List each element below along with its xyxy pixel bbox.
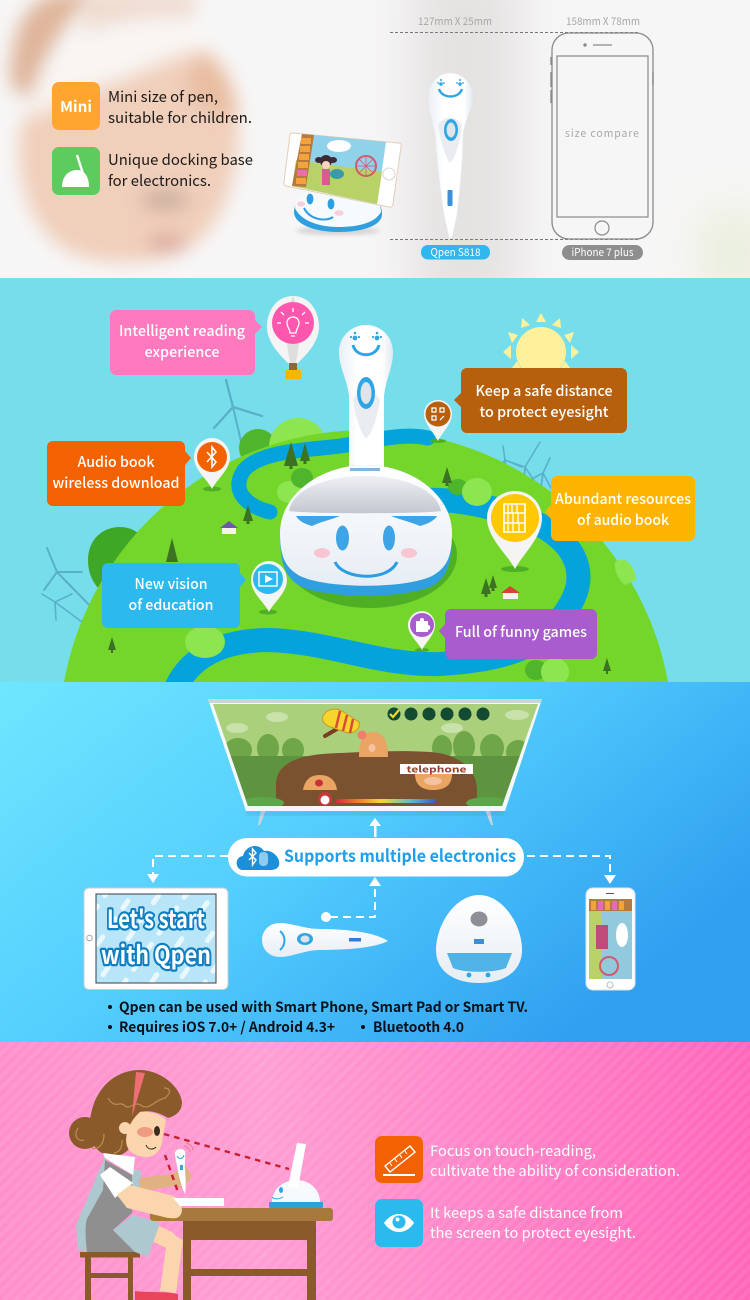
tablet: with Qpen (101, 936, 211, 972)
docking base (280, 465, 452, 596)
game: timer (318, 792, 436, 806)
callout: new vision (102, 563, 246, 628)
blurred baby photo (10, 0, 239, 263)
game: score dots (388, 708, 490, 720)
ear (119, 1122, 131, 1134)
panel: size comparison (0, 0, 750, 278)
callout: funny games: Full of funny games (455, 621, 587, 642)
pen held (175, 1143, 193, 1194)
callout: funny games (439, 609, 597, 659)
callout: intelligent reading: experience (144, 341, 220, 362)
panel: connectivity (0, 682, 750, 1042)
headband (132, 1072, 145, 1117)
sight lines (164, 1134, 289, 1192)
icon: pin bookshelf (487, 491, 542, 572)
game: word label: telephone (406, 762, 466, 776)
icon: pin safe distance (424, 400, 452, 443)
dock with phone (284, 133, 401, 235)
cardigan back (76, 1157, 120, 1252)
label: Qpen S818: Qpen S818 (430, 245, 481, 260)
tablet (84, 888, 228, 990)
callout: abundant resources (545, 476, 695, 541)
dock top view (436, 895, 522, 983)
trees (108, 442, 611, 674)
docking base small (269, 1143, 323, 1208)
text: docking base: for electronics. (108, 170, 211, 191)
text: distance: the screen to protect eyesight. (430, 1222, 636, 1243)
phone outline (551, 33, 653, 239)
bushes behind hill (88, 418, 332, 588)
callout: safe distance: to protect eyesight (480, 401, 609, 422)
text: docking base (108, 153, 252, 186)
callout: safe distance: Keep a safe distance (476, 380, 612, 401)
tablet: Let's start (107, 900, 205, 936)
callout: intelligent reading (110, 310, 262, 375)
icon: pin puzzle (408, 611, 435, 652)
text: focus (430, 1140, 680, 1181)
text: requirements: Requires iOS 7.0+ / Android 4.3+ (119, 1017, 335, 1037)
hair (90, 1070, 182, 1156)
connector: left (147, 856, 228, 883)
game: word label (400, 762, 473, 776)
book (173, 1198, 224, 1206)
wind turbines (42, 380, 552, 622)
text: mini size: Mini size of pen, (108, 86, 218, 107)
callout: audio book: wireless download (52, 472, 180, 493)
game: hammer (323, 709, 359, 736)
text: mini size (108, 90, 251, 123)
text: distance: It keeps a safe distance from (430, 1202, 623, 1223)
text: distance (430, 1202, 636, 1243)
near arm (117, 1185, 182, 1218)
pen horizontal (262, 923, 388, 957)
panel: features map (0, 278, 750, 682)
label: pen dimensions: 127mm X 25mm (418, 14, 492, 29)
houses (220, 521, 520, 599)
connector: pen to pill (321, 877, 381, 922)
callout: abundant resources: Abundant resources (555, 488, 691, 509)
icon: hot air balloon (267, 296, 319, 379)
far arm (139, 1166, 192, 1192)
label: size compare: size compare (565, 126, 639, 141)
dress (86, 1160, 135, 1252)
hair bun (69, 1117, 101, 1149)
callout: audio book: Audio book (78, 451, 155, 472)
cheek (137, 1127, 153, 1137)
text: focus: Focus on touch-reading, (430, 1140, 596, 1161)
sun (503, 313, 579, 368)
text: requirements: Bluetooth 4.0 (373, 1017, 464, 1037)
connector: right (527, 856, 616, 884)
shoe (135, 1291, 178, 1300)
text: mini size: suitable for children. (108, 107, 252, 128)
label: phone dimensions: 158mm X 78mm (566, 14, 640, 29)
dimension lines (390, 32, 640, 240)
label: iPhone 7 plus: iPhone 7 plus (572, 245, 634, 260)
mouth (146, 1145, 156, 1149)
pen (428, 73, 473, 238)
collar (103, 1153, 135, 1175)
callout: new vision: of education (128, 594, 214, 615)
text: focus: cultivate the ability of consideration. (430, 1160, 680, 1181)
icon: eye tile (375, 1199, 423, 1247)
callout: new vision: New vision (134, 573, 208, 594)
leg (150, 1225, 183, 1293)
icon: pin video (251, 561, 287, 614)
desk (150, 1208, 333, 1300)
sleeve (100, 1167, 133, 1198)
face (126, 1112, 166, 1157)
text: docking base: Unique docking base (108, 149, 253, 170)
icon: mini tile: Mini (60, 96, 92, 117)
dock shadow (298, 538, 457, 608)
icon: docking tile (52, 147, 100, 195)
game: moles (303, 730, 452, 790)
river (175, 436, 578, 690)
eye (154, 1126, 160, 1136)
text: requirements: Qpen can be used with Smart Phone, Smart Pad or Smart TV. (119, 997, 528, 1017)
text: requirements (108, 997, 528, 1037)
hill (64, 430, 668, 682)
arrow: up to tv (369, 818, 381, 837)
smartphone (586, 888, 635, 990)
pill: supports multiple electronics: Supports multiple electronics (284, 842, 516, 867)
icon: ruler tile (375, 1136, 423, 1183)
panel: eyesight (0, 1042, 750, 1300)
pen on dock (339, 325, 393, 470)
callout: audio book (47, 441, 191, 506)
stool (80, 1252, 140, 1300)
callout: intelligent reading: Intelligent reading (119, 320, 246, 341)
icon: pin bluetooth (194, 438, 230, 492)
tv (200, 699, 550, 825)
callout: safe distance (454, 368, 627, 433)
hair curls (76, 1088, 169, 1153)
hill bushes (185, 468, 636, 686)
illustration: girl at desk (69, 1070, 333, 1300)
pill: supports multiple electronics (228, 838, 524, 876)
callout: abundant resources: of audio book (577, 509, 670, 530)
icon: mini tile (52, 82, 100, 130)
